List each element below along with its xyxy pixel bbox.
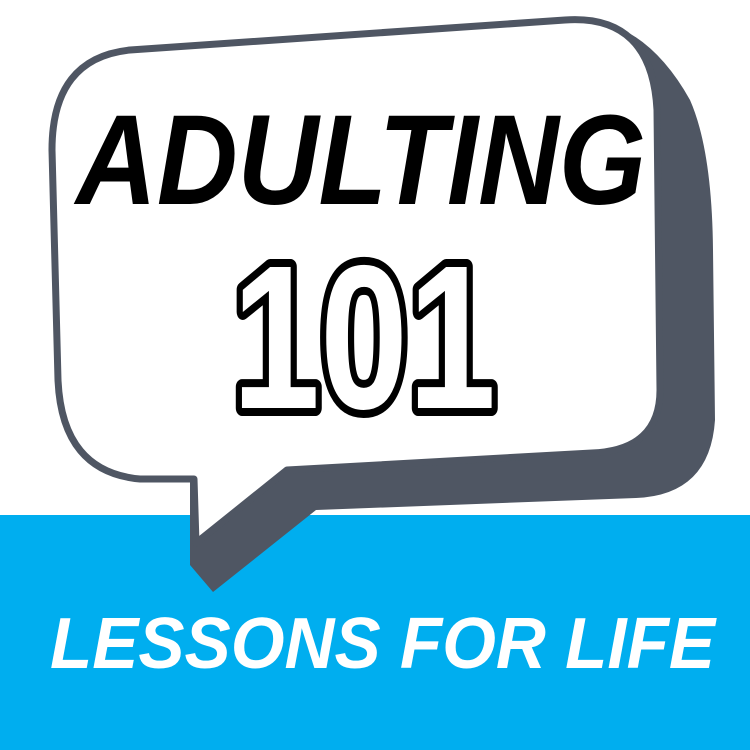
title: 101: 101 — [232, 223, 496, 452]
subtitle: Lessons for life: LESSONS FOR LIFE — [50, 604, 717, 684]
blue band — [0, 515, 750, 750]
speech bubble — [50, 18, 715, 592]
title: 101: 101 — [232, 223, 496, 452]
bubble white body — [52, 20, 660, 543]
bubble 3D shadow — [50, 18, 715, 592]
title: ADULTING: ADULTING — [73, 89, 646, 232]
